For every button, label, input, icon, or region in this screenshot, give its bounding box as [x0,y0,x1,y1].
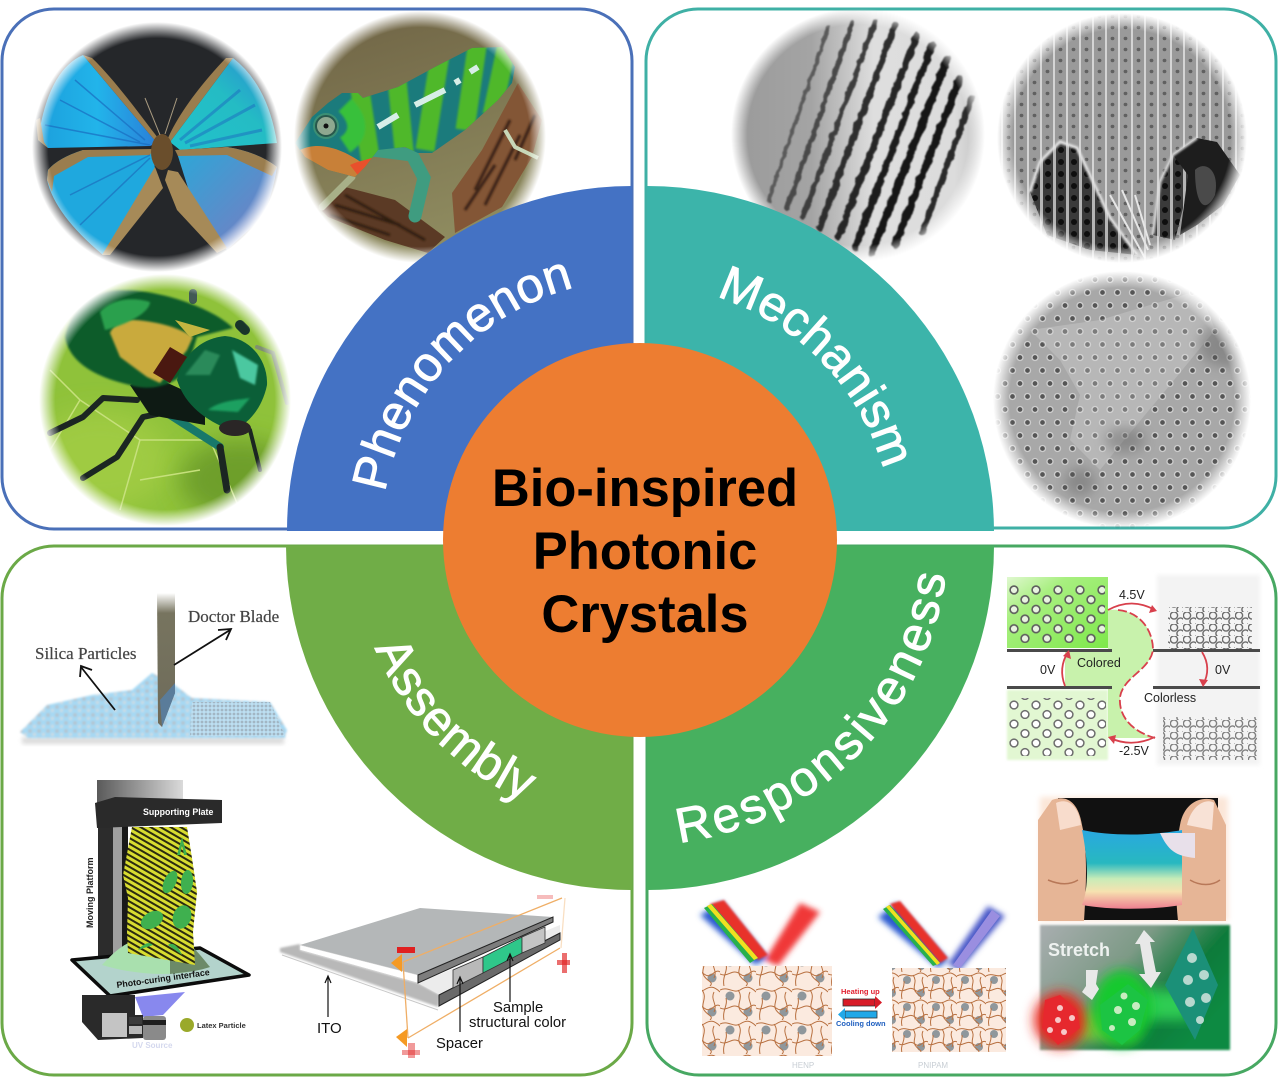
voltage labels: 4.5V [1119,588,1145,602]
disordered particles [1168,607,1252,649]
incident and reflected beams right [878,903,1005,970]
image: SEM of ridged butterfly scale [732,9,982,259]
image: electrochromic voltage cycle [1007,575,1260,765]
panel: mechanism frame [646,9,1276,528]
spacers and sample [453,957,483,988]
heating and cooling arrows: Heating up [841,987,880,996]
arrows [80,629,231,710]
UV light cone [135,992,185,1017]
chameleon legs [322,150,424,216]
label: stretch: Stretch [1048,940,1110,960]
image: electrochromic voltage cycle: 0V [1040,663,1056,677]
faded legend: HENP [792,1061,814,1070]
image: SEM of inverse opal honeycomb [994,272,1250,528]
image: ITO cell diagram [280,895,570,1058]
panel: assembly frame [2,546,632,1075]
label: sample: Sample [493,1000,543,1016]
platform base [72,948,249,996]
supporting plate [95,797,222,828]
printed mesh object [123,827,197,965]
image: thermo-responsive hydrogel [700,900,1006,1070]
label: spacer: Spacer [436,1036,483,1052]
central circle with title: Crystals [541,585,749,644]
latex particle legend [180,1018,246,1032]
latex particle legend: Latex Particle [197,1021,246,1030]
label: doctor blade: Doctor Blade [188,607,279,626]
image: stretched film held by fingers [1038,797,1228,921]
panel: responsiveness frame [647,546,1276,1075]
left hydrogel mesh [702,966,832,1056]
branch and trunk [318,83,542,253]
incident and reflected beams left [700,902,820,966]
quadrant: responsiveness: Responsiveness [676,573,946,843]
label: ITO: ITO [317,1020,342,1037]
label: silica particles: Silica Particles [35,644,137,663]
image: SEM of scale cross-section [998,14,1246,262]
central circle with title [443,343,837,737]
right hydrogel mesh [892,968,1006,1052]
image: electrochromic voltage cycle: Colorless [1144,691,1196,705]
image: blue morpho butterfly [30,20,285,275]
red gem [1042,995,1080,1045]
moving platform label: Moving Platform [85,857,95,928]
quadrant: assembly [286,548,630,890]
orange field lines [403,898,565,1038]
central circle with title: Photonic [533,522,757,581]
image: green jewel beetle on leaf [40,274,290,526]
beetle legs and antennae [50,293,287,490]
beetle thorax [177,336,267,430]
polarity marks [397,895,570,1058]
ordered particles [1009,585,1105,643]
quadrant: mechanism [648,186,994,531]
heating and cooling arrows [836,987,886,1028]
image: stretch colour change gems [1034,925,1230,1050]
UV source label: UV Source [132,1041,173,1050]
image: electrochromic voltage cycle: -2.5V [1119,744,1150,758]
image: electrochromic voltage cycle: 0V [1215,663,1231,677]
faded legend: PNIPAM [918,1061,948,1070]
quadrant: responsiveness [648,548,994,890]
quadrant: phenomenon [287,186,632,531]
image: doctor blade coating [20,593,287,744]
upper plate [300,908,553,975]
supporting plate: Supporting Plate [143,807,213,817]
image: electrochromic voltage cycle: Colored [1077,656,1121,670]
heating and cooling arrows: Cooling down [836,1019,886,1028]
beetle wing case [65,290,233,388]
quadrant: mechanism: Mechanism [720,266,906,467]
stretch arrows [1082,930,1161,1000]
particle film on substrate [20,673,287,744]
green gem [1100,984,1148,1045]
teal gem [1165,928,1218,1040]
interface label: Photo-curing interface [116,967,210,990]
image: photo-curing 3D printer [72,780,249,1050]
doctor blade [157,593,175,727]
faded legend [792,1061,948,1070]
central circle with title: Bio-inspired [492,459,798,518]
panel: phenomenon frame [2,9,632,529]
quadrant: assembly: Assembly [374,645,537,803]
chameleon body [296,47,515,177]
label: structural color: structural color [469,1015,566,1031]
image: chameleon on branch [290,8,552,268]
quadrant: phenomenon: Phenomenon [352,264,572,489]
light source box [82,995,143,1040]
lower plate [280,944,440,1007]
